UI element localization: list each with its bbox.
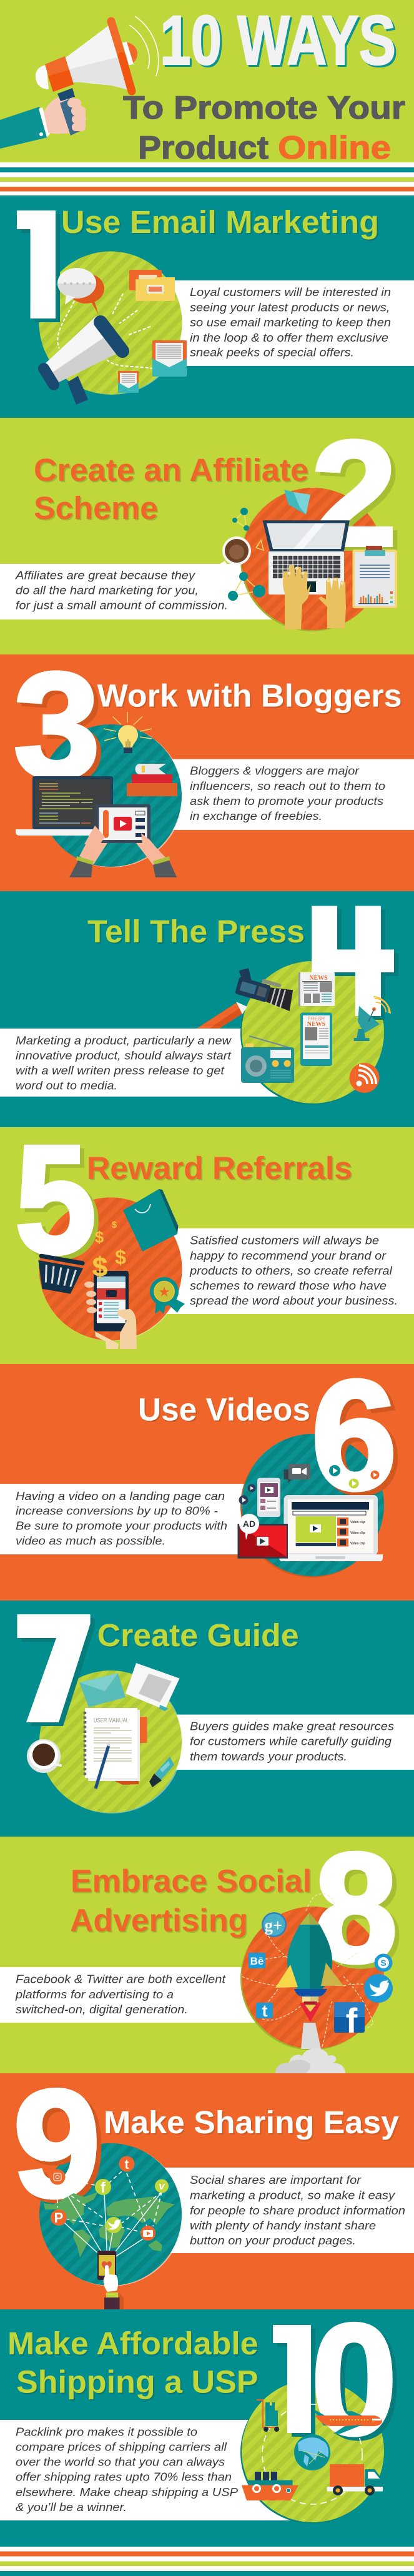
icon: award badge: ★ <box>158 1284 170 1300</box>
body text: video as much as possible. <box>16 1534 165 1547</box>
number 10: 1 <box>252 2297 335 2465</box>
icon: tablet news <box>300 1013 332 1066</box>
body text: happy to recommend your brand or <box>190 1249 387 1262</box>
body text: for just a small amount of commission. <box>16 598 228 612</box>
icon: small triangle <box>256 540 264 550</box>
icon: folder <box>284 490 310 515</box>
dashed route ring <box>262 2404 362 2504</box>
icon: tablet news: FRESH <box>308 1016 325 1022</box>
icon: phone in hand <box>84 1252 137 1349</box>
body text: Packlink pro makes it possible to <box>16 2425 197 2439</box>
icon: large envelope <box>152 340 187 377</box>
body text: in the loop & to offer them exclusive <box>190 331 388 344</box>
body text: compare prices of shipping carriers all <box>16 2440 227 2453</box>
heading: Create Guide <box>97 1617 299 1653</box>
illustration circle <box>39 1198 183 1341</box>
dollar signs: $ <box>115 1246 126 1268</box>
panel: 5 Reward Referrals <box>0 1114 414 1364</box>
body text: Be sure to promote your products with <box>16 1519 227 1532</box>
dollar signs: $ <box>95 1228 104 1246</box>
panel: 7 Create Guide <box>17 1614 414 1814</box>
panel: header <box>0 0 414 166</box>
panel: 6 Use Videos <box>0 1348 414 1601</box>
heading: Shipping a USP <box>16 2364 259 2400</box>
illustration circle <box>39 2143 183 2286</box>
body text <box>15 1973 226 2016</box>
heading: Use Email Marketing <box>61 204 379 240</box>
body text: with plenty of handy instant share <box>190 2219 376 2232</box>
body text <box>16 2425 239 2514</box>
title: Product Online: Online <box>278 130 391 166</box>
icon: small envelope <box>118 371 139 393</box>
icon: camera bubbles <box>283 1464 310 1483</box>
social icons: v <box>159 2180 165 2192</box>
icon: video camera <box>232 966 298 1011</box>
body text: seeing your latest products or news, <box>190 300 390 313</box>
icon: megaphone <box>41 316 123 405</box>
body text: Loyal customers will be interested in <box>190 285 391 299</box>
social icons: f <box>101 2179 106 2196</box>
heading: Make Sharing Easy <box>104 2105 400 2140</box>
icon: laptop with code <box>16 776 113 836</box>
text box <box>111 1715 414 1770</box>
illustration circle <box>240 1907 384 2050</box>
dashed orbit lines <box>242 1894 373 2048</box>
body text: Buyers guides make great resources <box>190 1720 394 1733</box>
icon: folders <box>129 270 175 301</box>
text box <box>0 1029 312 1097</box>
body text: platforms for advertising to a <box>15 1988 174 2001</box>
icon: cart with boxes <box>257 2400 279 2432</box>
dollar signs: $ <box>112 1220 117 1230</box>
body text <box>190 2173 405 2247</box>
icon: network top <box>232 508 249 531</box>
heading: Make Affordable <box>7 2326 259 2361</box>
icon: tablet news: NEWS <box>307 1021 326 1028</box>
body text: with a well writen press release to get <box>16 1064 225 1077</box>
body text: Affiliates are great because they <box>15 568 196 582</box>
icon: books <box>127 764 177 796</box>
icon: radio <box>241 1036 294 1083</box>
icon: coffee cup <box>220 536 251 565</box>
icon: Tumblr: t <box>262 2001 267 2020</box>
bottom stripes <box>0 2547 414 2576</box>
icon: laptop with video player: Video clip <box>350 1542 365 1546</box>
icon: light bulb <box>104 712 152 753</box>
connection lines <box>57 2167 162 2262</box>
illustration circle <box>240 488 384 631</box>
panel: 1 Use Email Marketing <box>17 210 414 405</box>
number 3: 3 <box>14 641 100 809</box>
illustration circle <box>39 251 183 395</box>
icon: laptop with video player: Video clip <box>350 1521 365 1524</box>
number 8: 8 <box>314 1820 398 1995</box>
body text: for customers while carefully guiding <box>190 1735 392 1748</box>
body text: products to others, so create referral <box>189 1264 393 1277</box>
heading: Use Videos <box>138 1392 310 1428</box>
illustration circle <box>39 1670 183 1814</box>
play buttons on number <box>329 1465 379 1489</box>
body text: offer shipping rates upto 70% less than <box>16 2470 232 2484</box>
icon: rocket <box>275 1913 343 2049</box>
small play buttons <box>239 1484 256 1505</box>
icon: arm <box>197 1002 247 1029</box>
body text: spread the word about your business. <box>190 1294 398 1307</box>
icon: megaphone in hand <box>0 16 159 149</box>
number 2: 2 <box>311 409 397 577</box>
icon: RSS <box>350 1063 380 1093</box>
number 6: 6 <box>311 1348 397 1522</box>
text box <box>111 1228 414 1314</box>
panel: 9 Make Sharing Easy <box>0 2058 414 2309</box>
icon: clipboard <box>352 546 397 608</box>
panel: 2 Create an Affiliate Scheme <box>0 409 414 654</box>
panel: 3 Work with Bloggers <box>0 641 414 891</box>
icon: phone in hand: $ <box>92 1252 107 1283</box>
icon: coffee cup <box>27 1739 61 1773</box>
number 9: 9 <box>13 2058 101 2229</box>
icon: newspaper: NEWS <box>309 975 328 982</box>
icon: Skype: S <box>380 1958 387 1968</box>
icon: Google plus: g+ <box>265 1916 282 1935</box>
icon: envelope <box>79 1673 126 1707</box>
body text: word out to media. <box>16 1079 117 1092</box>
body text: do all the hard marketing for you, <box>16 583 199 597</box>
body text <box>190 764 385 822</box>
text box <box>111 280 414 366</box>
icon: red AD screen <box>237 1514 288 1559</box>
social icons: t <box>125 2158 129 2172</box>
heading <box>34 452 308 526</box>
icon: network bottom <box>228 572 265 601</box>
icon: Facebook: f <box>346 2001 358 2040</box>
icon: hands <box>283 565 346 629</box>
illustration circle <box>240 2380 384 2524</box>
social icons: P <box>54 2210 63 2226</box>
body text <box>16 1489 227 1547</box>
illustration circle <box>39 724 183 867</box>
body text: ask them to promote your products <box>190 794 383 807</box>
body text: influencers, so reach out to them to <box>190 779 385 792</box>
number 10: 0 <box>311 2291 397 2467</box>
icon: Skype <box>375 1953 392 1972</box>
heading: Create an Affiliate <box>34 452 308 488</box>
icon: laptop with video player: Video clip <box>350 1531 365 1535</box>
text box <box>0 1967 312 2023</box>
icon: smoke cloud <box>275 2048 345 2073</box>
icon: speech bubbles <box>57 268 104 315</box>
number 4: 4 <box>311 879 395 1046</box>
icon: Tumblr <box>256 2001 273 2020</box>
title: Product Online: Product <box>138 130 269 166</box>
icon: truck <box>327 2464 383 2495</box>
body text: them towards your products. <box>190 1750 347 1763</box>
icon: award badge <box>150 1277 185 1314</box>
body text: switched-on, digital generation. <box>16 2003 188 2016</box>
title: Product Online <box>138 130 391 166</box>
icon: phone with video <box>257 1478 280 1517</box>
icon: shopping bag <box>123 1189 178 1251</box>
dollar signs <box>95 1220 126 1268</box>
text box <box>111 759 414 830</box>
illustration circle <box>240 961 384 1105</box>
title: To Promote Your: To Promote Your <box>123 90 405 126</box>
body text: marketing a product, so make it easy <box>190 2188 396 2202</box>
body text: so use email marketing to keep then <box>190 316 391 328</box>
social icons <box>50 2156 169 2241</box>
heading: Reward Referrals <box>87 1150 352 1186</box>
icon: Facebook <box>334 2001 365 2040</box>
body text: elsewhere. Make cheap shipping a USP <box>16 2485 239 2499</box>
body text: Social shares are important for <box>190 2173 362 2186</box>
body text <box>15 568 228 612</box>
icon: user manual: USER MANUAL <box>94 1717 129 1724</box>
body text: button on your product pages. <box>190 2234 356 2247</box>
icon: globe <box>294 2434 330 2470</box>
icon: cargo ship <box>242 2472 298 2500</box>
body text: Having a video on a landing page can <box>16 1489 225 1503</box>
body text <box>190 1720 394 1763</box>
body text: innovative product, should always start <box>16 1049 232 1062</box>
body text: sneak peeks of special offers. <box>190 346 354 359</box>
heading: Embrace Social <box>71 1863 312 1899</box>
number 5: 5 <box>15 1114 96 1286</box>
icon: red AD screen: AD <box>243 1519 255 1529</box>
icon: highlighter <box>149 1757 174 1787</box>
text box <box>0 564 312 619</box>
panel: 10 Make Affordable Shipping a USP <box>0 2309 414 2524</box>
icon: paper sheet <box>126 1663 180 1711</box>
dashed lines <box>57 294 152 368</box>
heading: Scheme <box>34 490 158 526</box>
icon: tablet and hands <box>69 804 177 877</box>
heading: Tell The Press <box>87 914 305 949</box>
icon: satellite dish <box>353 997 390 1041</box>
heading <box>7 2326 259 2400</box>
icon: newspaper <box>298 972 335 1006</box>
panel: 8 Embrace Social Advertising <box>0 1820 414 2073</box>
body text: schemes to reward those who have <box>190 1279 387 1292</box>
number 10 <box>273 2322 397 2441</box>
icon: laptop with video player <box>279 1495 383 1561</box>
body text: Satisfied customers will always be <box>190 1234 379 1246</box>
icon: airplane <box>313 2409 382 2434</box>
heading: Work with Bloggers <box>97 678 402 713</box>
body text <box>189 1234 398 1307</box>
number 7: 7 <box>12 1585 96 1752</box>
body text <box>16 1034 232 1092</box>
body text <box>190 285 391 359</box>
heading: Advertising <box>70 1903 248 1938</box>
text box <box>0 1484 312 1554</box>
text box <box>111 2168 414 2253</box>
world map <box>44 2192 175 2258</box>
body text: increase conversions by up to 80% - <box>16 1504 218 1517</box>
icon: Behance: Bē <box>250 1955 264 1967</box>
body text: Facebook & Twitter are both excellent <box>16 1973 226 1986</box>
body text: & you’ll be a winner. <box>16 2500 127 2514</box>
body text: over the world so that you can always <box>16 2455 225 2468</box>
body text: Marketing a product, particularly a new <box>16 1034 232 1047</box>
icon: user manual <box>85 1708 147 1789</box>
heading <box>70 1863 312 1938</box>
illustration circle <box>240 1434 384 1577</box>
text box <box>0 2420 312 2520</box>
body text: in exchange of freebies. <box>190 809 322 822</box>
icon: Behance <box>249 1953 265 1968</box>
body text: Bloggers & vloggers are major <box>190 764 360 777</box>
icon: Google plus <box>262 1912 287 1937</box>
icon: Twitter <box>364 1974 393 2003</box>
icon: phone and hand <box>97 2251 124 2309</box>
top stripes <box>0 162 414 195</box>
icon: basket <box>34 1253 85 1295</box>
panel: 4 Tell The Press <box>0 906 398 1105</box>
icon: laptop <box>264 521 349 595</box>
body text: for people to share product information <box>190 2204 405 2217</box>
